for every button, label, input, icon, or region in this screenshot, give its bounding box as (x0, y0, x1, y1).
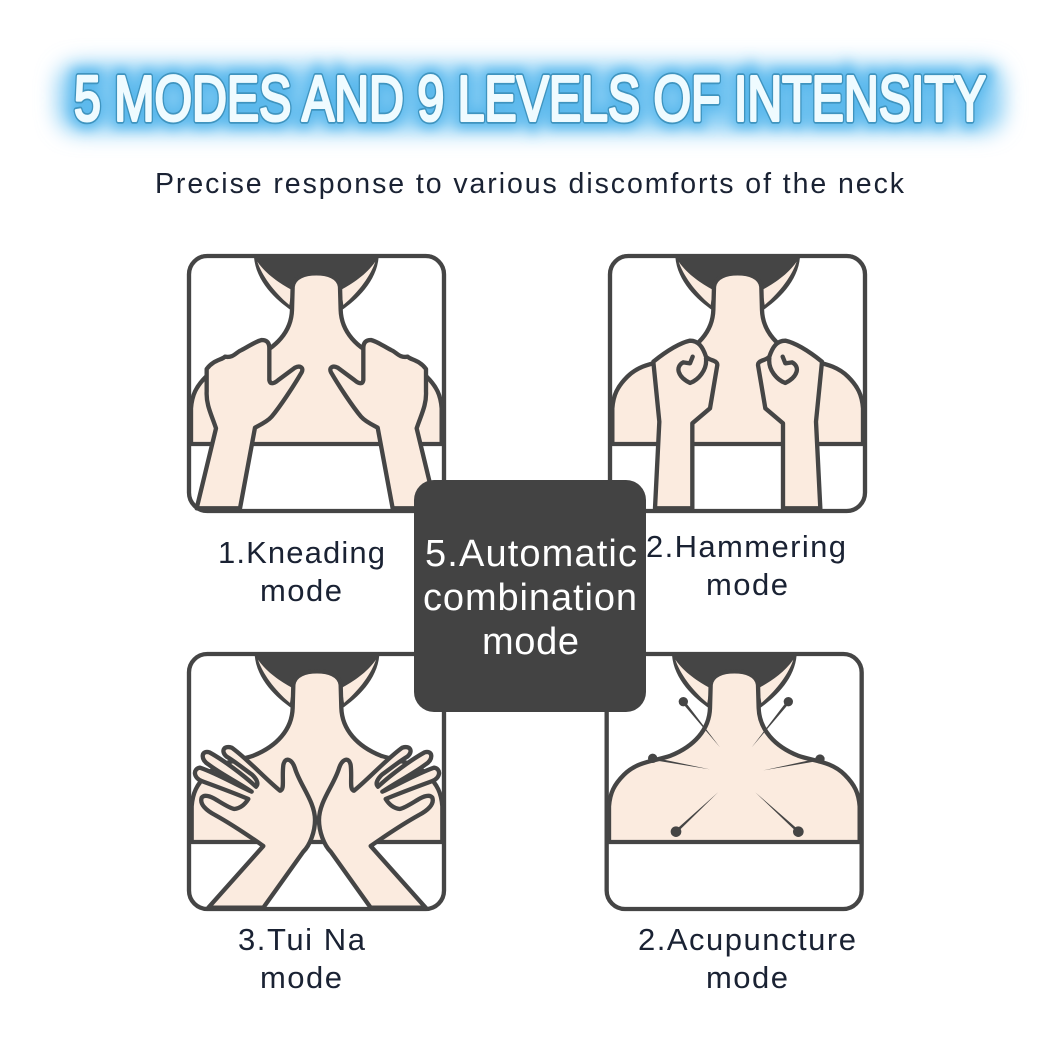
panel: hammering mode (610, 256, 865, 511)
center card: automatic combination mode: mode (482, 621, 579, 663)
label: kneading (218, 535, 385, 608)
label: hammering: 2.Hammering (646, 529, 846, 564)
right open hand (319, 747, 439, 908)
left open hand (195, 747, 315, 908)
label: acupuncture (638, 922, 856, 995)
center card: automatic combination mode: combination (423, 577, 637, 619)
label: kneading: 1.Kneading (218, 535, 385, 570)
right fist (758, 341, 822, 508)
left kneading hand (197, 340, 302, 508)
panel: acupuncture mode (607, 654, 862, 909)
label: acupuncture: mode (706, 960, 788, 995)
label: kneading: mode (260, 573, 342, 608)
label: tui na: mode (260, 960, 342, 995)
panel: tui na mode (189, 654, 444, 909)
acupuncture needles (648, 697, 825, 837)
right kneading hand (330, 340, 436, 508)
center card: automatic combination mode (414, 480, 646, 712)
label: acupuncture: 2.Acupuncture (638, 922, 856, 957)
panel: kneading mode (189, 256, 444, 511)
label: hammering: mode (706, 567, 788, 602)
label: tui na (238, 922, 366, 995)
label: hammering (646, 529, 846, 602)
left fist (653, 341, 717, 508)
label: tui na: 3.Tui Na (238, 922, 366, 957)
center card: automatic combination mode: 5.Automatic (425, 533, 637, 575)
subtitle: Precise response to various discomforts of the neck (155, 168, 905, 200)
